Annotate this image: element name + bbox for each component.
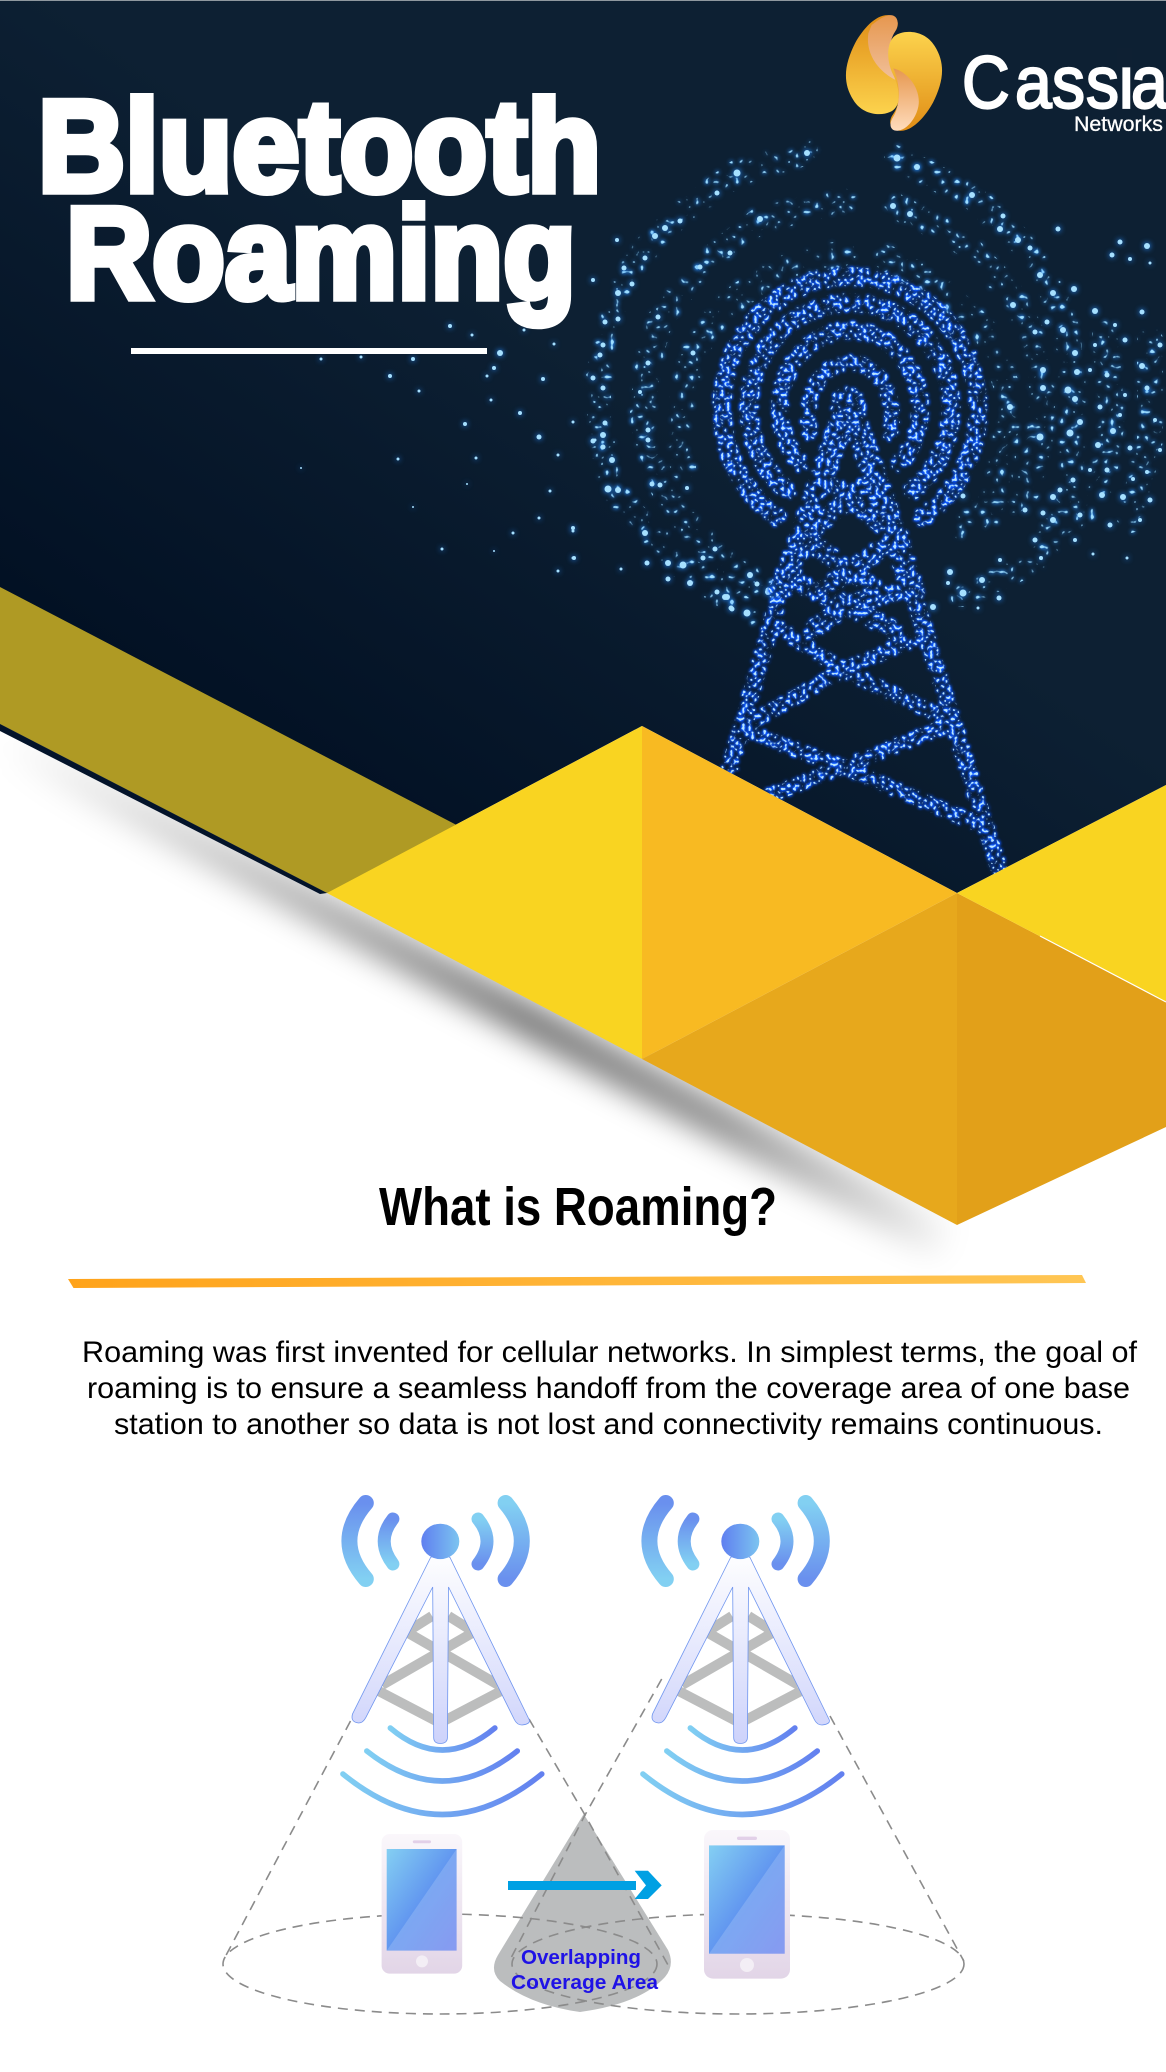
antenna signal arcs [349,1503,522,1579]
logo wordmark: Cassia [962,40,1166,124]
panel: dark hero background [0,0,1166,893]
label: overlapping coverage area [511,1947,659,1994]
body paragraph: roaming is to ensure a seamless handoff from the coverage area of one base [87,1372,1130,1405]
tower 2 [643,1503,842,1814]
isolated glowing particles [300,150,1162,616]
wordmark i dot mask [1117,48,1132,67]
title: Bluetooth Roaming: Roaming [66,180,576,326]
title: Bluetooth Roaming [38,73,601,326]
particle signal rings and tower [722,277,998,866]
cut-corner drop shadow [0,722,957,1258]
heading: What is Roaming?: What is Roaming? [379,1177,777,1237]
grey lattice [379,1616,501,1723]
coverage cones and ellipses [223,1679,964,2014]
top edge line [0,0,1166,1]
title underline [131,348,487,354]
label: overlapping coverage area: Overlapping [521,1947,641,1969]
antenna ball [421,1524,459,1559]
body paragraph: Roaming was first invented for cellular networks. In simplest terms, the goal of [82,1336,1138,1369]
left phone [382,1834,462,1974]
orange divider [68,1275,1086,1288]
arrow: handoff direction [508,1871,662,1899]
logo: Cassia Networks [846,15,1166,136]
logo mark [846,15,942,131]
overlapping coverage area shape [494,1814,671,2012]
body paragraph: station to another so data is not lost and connectivity remains continuous. [114,1408,1103,1441]
scattered particle rings [597,152,1150,613]
right phone [704,1830,790,1979]
olive diagonal band [0,587,470,893]
signal ring arcs [722,277,978,517]
dark edge under band [0,724,327,894]
tower legs and lattice [730,404,998,866]
ground signal arcs [343,1728,542,1814]
tower 1 [343,1503,542,1814]
title: Bluetooth Roaming: Bluetooth [38,73,601,219]
diagram: roaming between two towers [223,1503,964,2014]
geometric yellow facets [327,726,1166,1225]
label: overlapping coverage area: Coverage Area [511,1972,659,1994]
logo subtitle: Networks [1074,113,1163,136]
body paragraph [82,1336,1138,1441]
tower legs [352,1554,529,1744]
